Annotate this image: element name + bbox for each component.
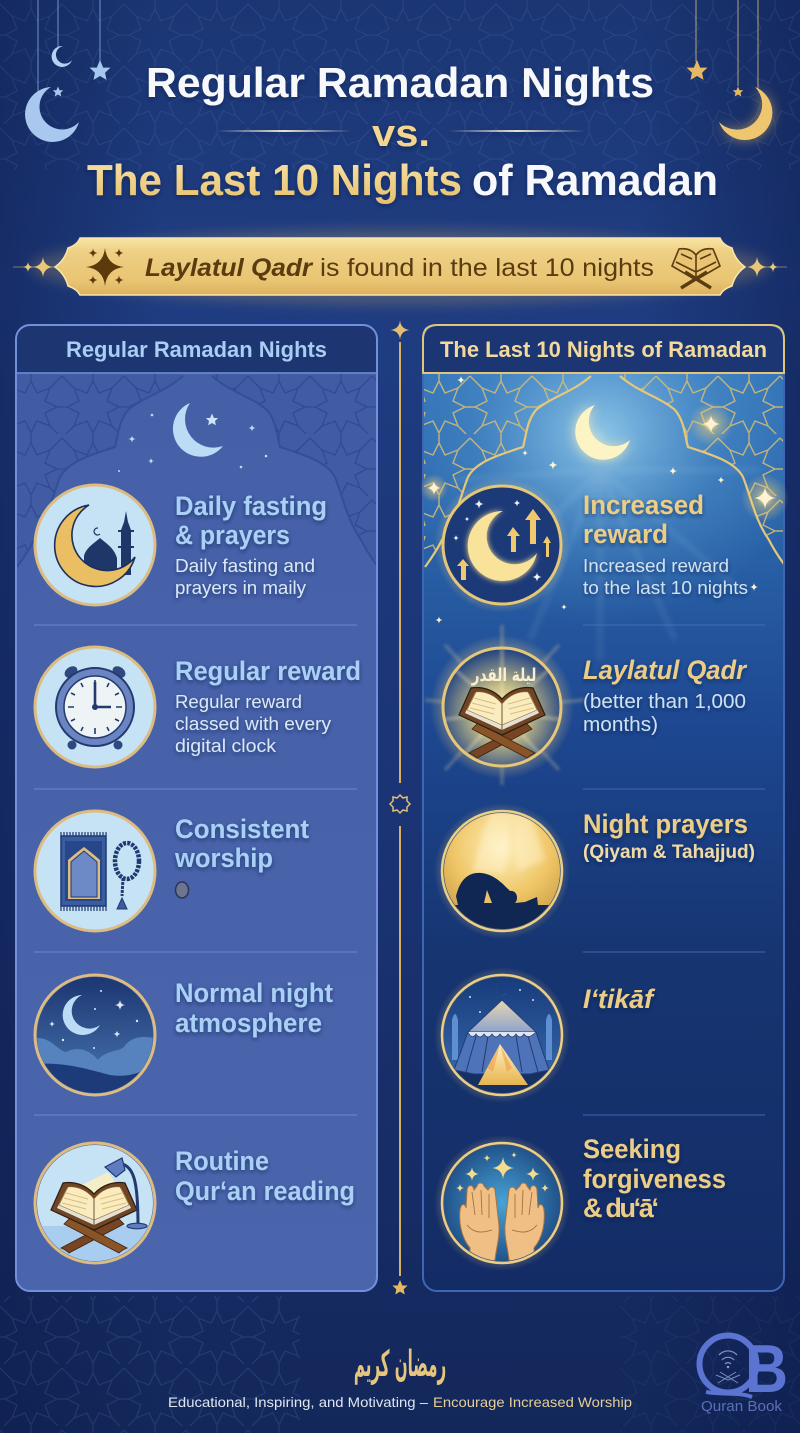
footer tagline: Encourage Increased Worship (433, 1394, 632, 1410)
text: Regular reward (175, 656, 361, 686)
text: Routine (175, 1146, 269, 1176)
row: seeking forgiveness (434, 1134, 726, 1271)
icon: prayer rug and beads (35, 811, 155, 931)
callout banner: Laylatul Qadr (13, 229, 787, 305)
text: forgiveness (583, 1164, 726, 1194)
text: months) (583, 714, 658, 736)
text: Regular reward (175, 692, 302, 712)
icon: raised hands with stars (434, 1135, 570, 1271)
logo: Quran Book (700, 1331, 788, 1415)
text: (Qiyam & Tahajjud) (583, 842, 755, 863)
icon: night sky with clouds (30, 975, 160, 1100)
footer tagline (168, 1394, 632, 1410)
icon: alarm clock (35, 647, 155, 767)
icon: sparkles (86, 248, 124, 286)
icon: tent (434, 967, 570, 1103)
banner text: is found in the last 10 nights (320, 254, 654, 282)
text (583, 490, 748, 598)
icon: prostration silhouette (434, 803, 570, 939)
text (583, 655, 747, 736)
panel heading: The Last 10 Nights of Ramadan (440, 337, 767, 362)
text: Daily fasting (175, 491, 327, 521)
row: night prayers (434, 803, 755, 939)
text: worship (174, 843, 273, 873)
text: Night prayers (583, 809, 748, 839)
icon: book and lamp (35, 1143, 155, 1266)
title (87, 59, 718, 205)
title: Regular Ramadan Nights (146, 59, 654, 106)
text: (better than 1,000 (583, 691, 746, 713)
footer tagline: Educational, Inspiring, and Motivating – (168, 1394, 428, 1410)
text: reward (583, 519, 668, 549)
center divider (390, 320, 410, 1294)
text: digital clock (175, 736, 277, 756)
text: Daily fasting and (175, 556, 315, 576)
row: daily fasting & prayers (35, 485, 327, 605)
icon: open book on stand (672, 249, 720, 288)
text: classed with every (175, 714, 331, 734)
text (583, 1134, 726, 1223)
text (583, 809, 755, 863)
panel heading: Regular Ramadan Nights (66, 337, 327, 362)
panel: the last 10 nights of Ramadan (421, 324, 788, 1292)
text: Increased reward (583, 556, 729, 576)
text: Seeking (583, 1134, 681, 1164)
text: Laylatul Qadr (583, 655, 747, 685)
text (175, 656, 361, 756)
title: vs. (372, 113, 430, 155)
row: Laylatul Qadr (425, 625, 747, 785)
icon: crescent with arrows (434, 477, 570, 613)
text: & prayers (175, 520, 290, 550)
text: Qur‘an reading (175, 1176, 355, 1206)
text: prayers in maily (175, 578, 306, 598)
footer calligraphy: رمضان كريم (354, 1342, 446, 1385)
hanging ornaments: right moon and stars (687, 0, 772, 140)
row: normal night atmosphere (30, 975, 333, 1100)
row: increased reward (434, 477, 748, 613)
text (175, 1146, 355, 1206)
title: of Ramadan (472, 156, 718, 205)
logo: Quran Book: B (745, 1331, 788, 1407)
text: Increased (583, 490, 704, 520)
hanging ornaments: left moons and star (25, 0, 110, 142)
row: I'tikaf (434, 967, 656, 1103)
icon: glowing book with Arabic (425, 625, 585, 785)
text: & duʻāʻ (583, 1193, 659, 1223)
text: Normal night (175, 978, 333, 1008)
text (174, 814, 309, 873)
sparkles (420, 376, 789, 624)
title: The Last 10 Nights (87, 156, 462, 205)
banner text: Laylatul Qadr (145, 254, 313, 282)
panel: regular Ramadan nights (14, 325, 382, 1291)
row: consistent worship (35, 811, 309, 931)
icon: crescent and mosque (35, 485, 155, 605)
text: atmosphere (175, 1008, 322, 1038)
glowing moon (575, 405, 630, 460)
icon: glowing book with Arabic: ليلة القدر (471, 664, 536, 686)
text (175, 978, 333, 1038)
bead artifact (176, 882, 188, 898)
text (175, 491, 327, 598)
text: Iʻtikāf (583, 984, 656, 1014)
moon and stars decoration (118, 403, 267, 472)
row: regular reward (35, 647, 361, 767)
logo: Quran Book: Quran Book (701, 1399, 783, 1415)
row: routine Qur'an reading (35, 1143, 355, 1266)
text: Consistent (175, 814, 309, 844)
banner text (145, 254, 654, 282)
text: to the last 10 nights (583, 578, 748, 598)
